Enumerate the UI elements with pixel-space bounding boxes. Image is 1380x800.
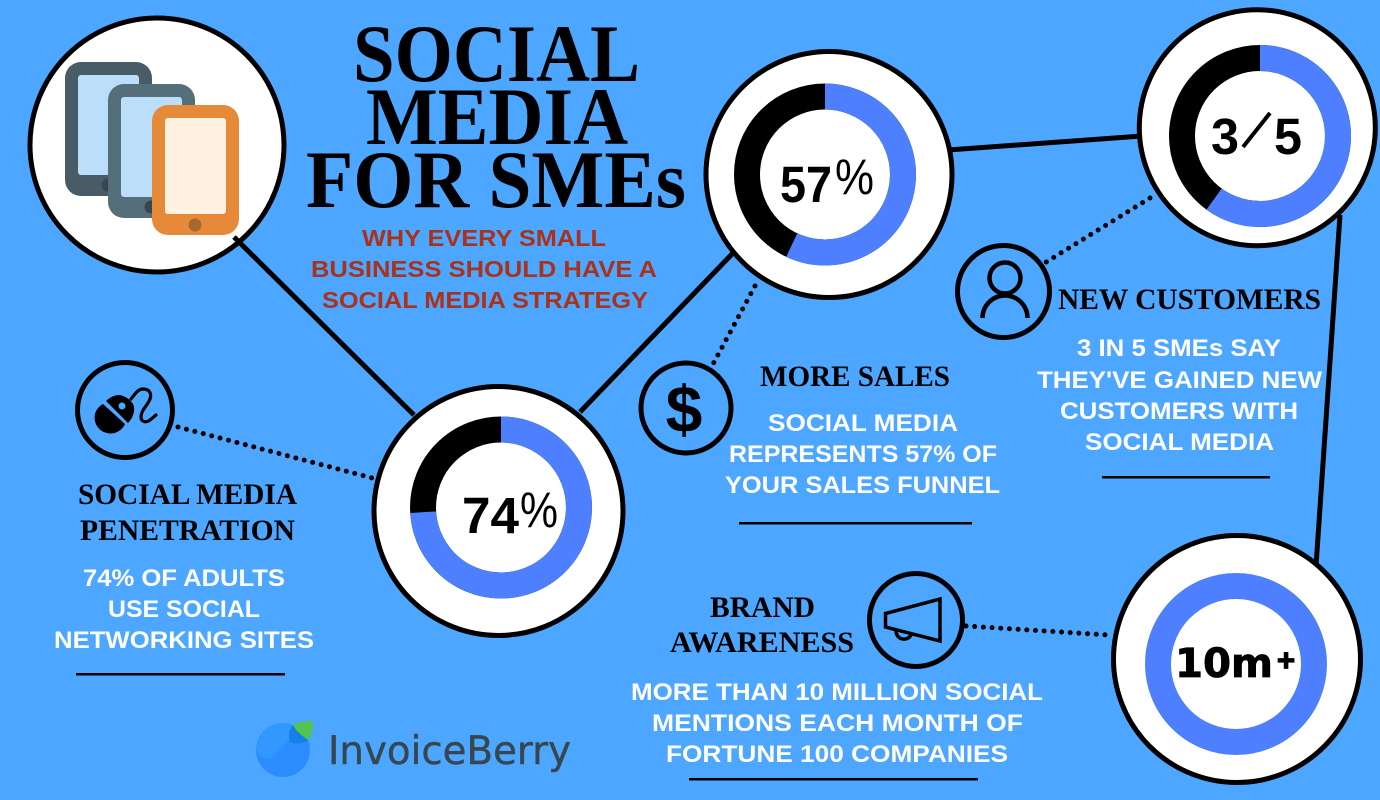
text: more sales body: YOUR SALES FUNNEL [725,472,1000,499]
donut: 10m+: + [1276,646,1296,674]
logo: InvoiceBerry: InvoiceBerry [328,729,571,774]
logo: InvoiceBerry [256,721,571,777]
donut: 10m+: 10m [1175,641,1273,687]
donut: 57%: % [835,149,874,205]
subtitle: BUSINESS SHOULD HAVE A [311,256,657,282]
donut: 74%: % [520,482,558,538]
donut: 3/5 [1139,10,1375,246]
text: penetration body: USE SOCIAL [108,596,260,623]
donut: 74%: 74 [462,487,520,544]
donut: 74% [374,386,623,636]
text: new customers body: CUSTOMERS WITH [1060,398,1298,425]
heading: social media penetration [78,478,297,547]
connector lines [580,136,1340,566]
text: brand awareness body [631,679,1043,768]
donut: 3/5: 5 [1274,108,1302,165]
underline: brand awareness [689,778,978,780]
subtitle [311,225,657,313]
text: brand awareness body: MORE THAN 10 MILLION SOCIAL [631,679,1043,706]
icon: computer mouse [78,362,172,458]
donut: 57%: 57 [780,156,832,213]
donut: 3/5: 3 [1211,108,1239,165]
icon: orange phone [152,105,239,235]
text: new customers body: 3 IN 5 SMEs SAY [1077,335,1281,362]
text: more sales body: SOCIAL MEDIA [768,410,958,437]
heading: social media penetration: SOCIAL MEDIA [78,478,297,511]
icon: dollar: $ [666,372,702,446]
icon: phones circle [30,18,284,272]
subtitle: SOCIAL MEDIA STRATEGY [322,287,648,313]
title: FOR SMEs [306,134,686,225]
text: penetration body [54,565,314,654]
text: more sales body [725,410,1000,499]
title: SOCIAL [353,8,640,99]
underline: penetration [76,673,285,676]
text: brand awareness body: MENTIONS EACH MONTH OF [652,710,1023,737]
icon: middle phone [108,84,195,218]
text: new customers body [1037,335,1322,456]
heading: new customers: NEW CUSTOMERS [1058,283,1321,316]
underline: new customers [1102,476,1270,478]
text: new customers body: THEY'VE GAINED NEW [1037,367,1322,394]
heading: brand awareness: AWARENESS [670,626,854,659]
title [306,8,686,225]
text: penetration body: 74% OF ADULTS [83,565,285,592]
heading: social media penetration: PENETRATION [80,514,295,547]
text: more sales body: REPRESENTS 57% OF [729,441,997,468]
connector: phones to 74% [234,237,414,415]
subtitle: WHY EVERY SMALL [362,225,606,251]
icon: dark phone [65,62,152,196]
heading: brand awareness [670,591,854,659]
underline: more sales [739,522,972,524]
icon: megaphone [870,574,962,666]
text: penetration body: NETWORKING SITES [54,627,314,654]
title: MEDIA [366,71,628,162]
icon: dollar [641,363,731,453]
text: brand awareness body: FORTUNE 100 COMPANIES [666,741,1008,768]
icon: person [958,246,1050,338]
donut: 57% [706,52,952,298]
text: new customers body: SOCIAL MEDIA [1085,429,1274,456]
dotted connectors [178,198,1150,635]
heading: brand awareness: BRAND [710,591,815,624]
donut: 10m+ [1114,536,1360,782]
heading: more sales: MORE SALES [760,360,950,393]
